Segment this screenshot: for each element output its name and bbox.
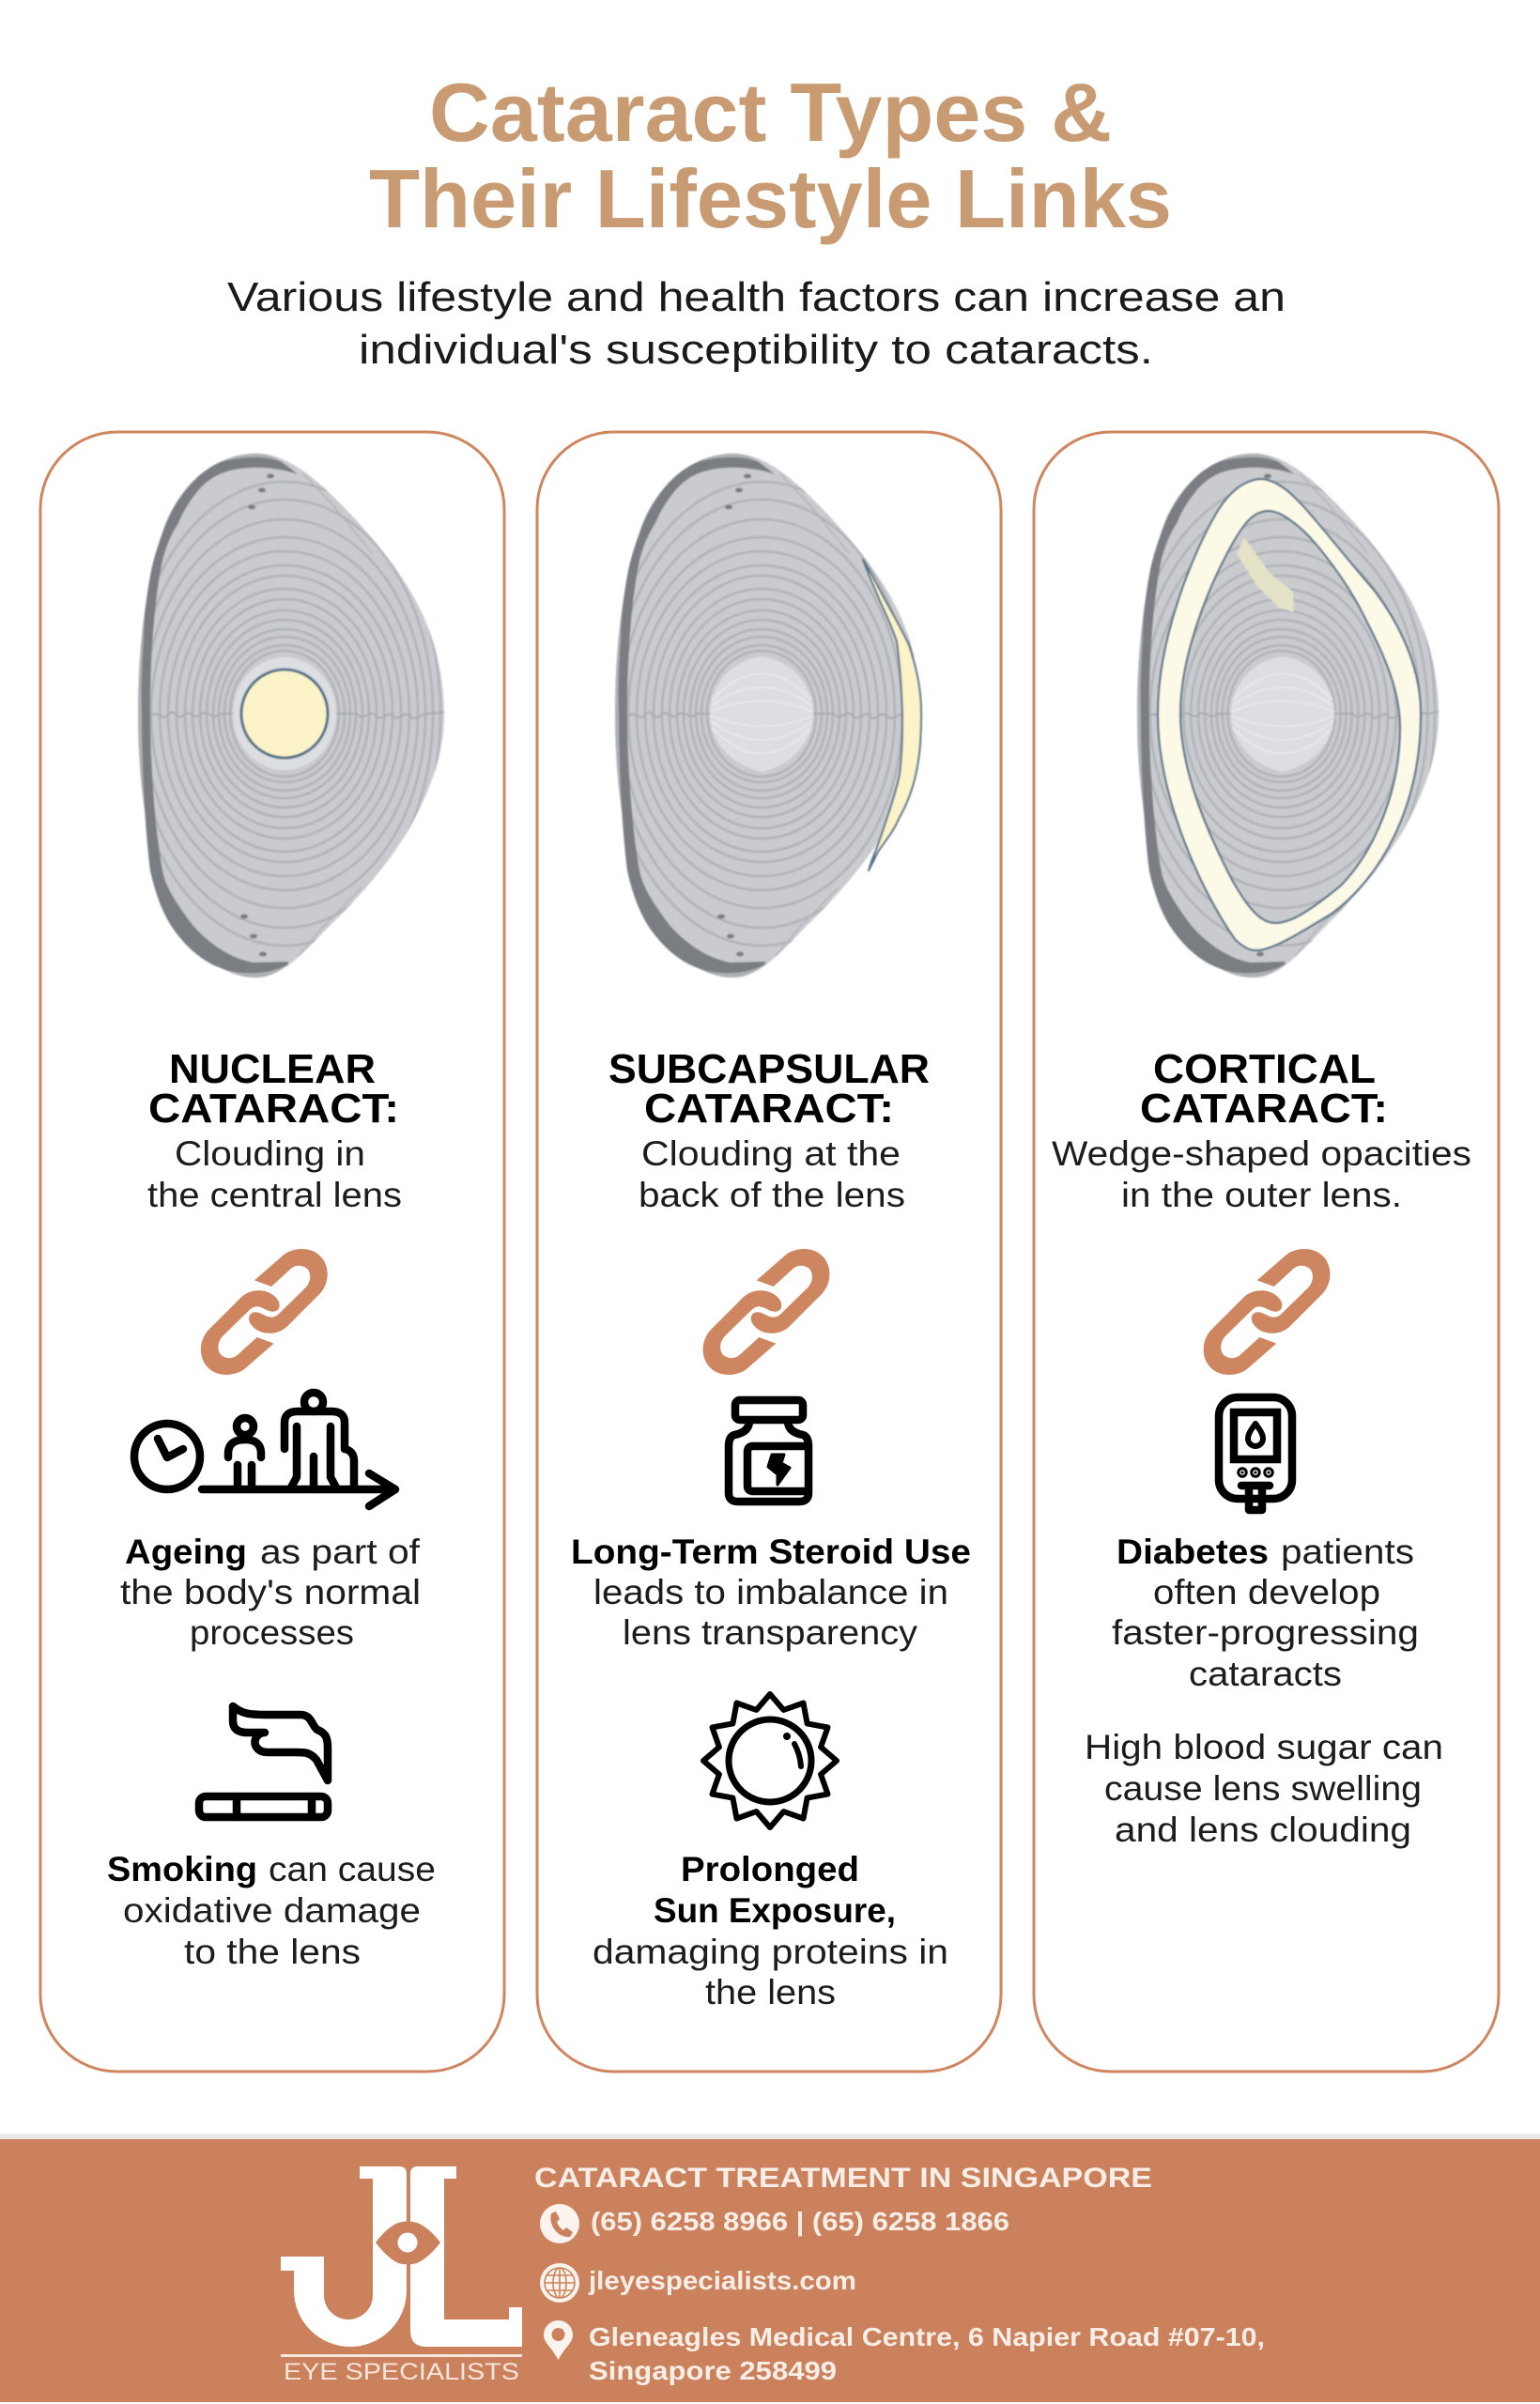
text: ageing: Ageing: [125, 1533, 247, 1571]
description: Clouding at the: [641, 1134, 901, 1173]
panel outline: [1034, 432, 1499, 2072]
heading: CATARACT:: [1140, 1086, 1388, 1132]
icon: glucose meter: [1219, 1397, 1292, 1510]
text: ageing: the body's normal: [120, 1573, 421, 1611]
text: smoking: to the lens: [184, 1933, 361, 1971]
panel outline: [537, 432, 1001, 2072]
text: phone numbers: (65) 6258 8966 | (65) 6258 1866: [591, 2207, 1009, 2236]
text: smoking: Smoking: [107, 1850, 257, 1888]
icon: ageing timeline: [134, 1393, 395, 1506]
title: Cataract Types &: [429, 66, 1112, 159]
text: high blood sugar: cause lens swelling: [1104, 1769, 1422, 1808]
panel: cortical cataract: [1034, 432, 1499, 2072]
text: ageing: as part of: [260, 1533, 421, 1571]
heading: CORTICAL: [1153, 1046, 1376, 1092]
icon: sun: [703, 1694, 837, 1827]
text: address: [589, 2322, 1265, 2385]
heading: SUBCAPSULAR: [608, 1046, 930, 1092]
text: steroid use: Long-Term Steroid Use: [571, 1533, 971, 1571]
logo: [281, 2166, 522, 2385]
icon: cigarette: [199, 1706, 328, 1817]
description: in the outer lens.: [1121, 1176, 1402, 1214]
text: diabetes: faster-progressing: [1112, 1613, 1419, 1652]
text: steroid use: leads to imbalance in: [593, 1573, 948, 1611]
text: high blood sugar: [1085, 1728, 1443, 1849]
description: [639, 1134, 905, 1214]
text: sun exposure: the lens: [705, 1973, 836, 2011]
heading: CATARACT:: [148, 1086, 399, 1132]
heading: [148, 1046, 399, 1132]
text: sun exposure: damaging proteins in: [593, 1933, 948, 1971]
logo: EYE SPECIALISTS: [284, 2359, 519, 2385]
heading: [608, 1046, 930, 1132]
text: high blood sugar: and lens clouding: [1115, 1811, 1411, 1849]
text: smoking: oxidative damage: [123, 1891, 421, 1930]
text: high blood sugar: High blood sugar can: [1085, 1728, 1443, 1766]
icon: link: [201, 1249, 328, 1375]
text: steroid use: lens transparency: [623, 1613, 918, 1652]
title: Their Lifestyle Links: [369, 152, 1172, 245]
text: diabetes: [1112, 1533, 1419, 1693]
description: [147, 1134, 402, 1214]
heading: [1140, 1046, 1388, 1132]
subtitle: Various lifestyle and health factors can increase an: [227, 274, 1286, 320]
lens diagram: central clouding: [129, 454, 444, 978]
icon: link: [703, 1249, 829, 1375]
text: ageing: processes: [190, 1613, 354, 1652]
description: back of the lens: [639, 1176, 905, 1214]
description: Wedge-shaped opacities: [1052, 1134, 1471, 1173]
panel: nuclear cataract: [40, 432, 504, 2072]
text: smoking: can cause: [269, 1850, 436, 1888]
icon: phone: [540, 2204, 579, 2243]
icon: location pin: [544, 2320, 573, 2360]
footer heading: CATARACT TREATMENT IN SINGAPORE: [534, 2163, 1152, 2194]
panel outline: [40, 432, 504, 2072]
footer band: [0, 2134, 1540, 2402]
subtitle: individual's susceptibility to cataracts.: [359, 327, 1153, 373]
text: smoking: [107, 1850, 436, 1971]
lens diagram: clouding at back: [606, 454, 921, 978]
text: address: Singapore 258499: [589, 2356, 837, 2385]
description: the central lens: [147, 1176, 402, 1214]
text: website: jleyespecialists.com: [588, 2266, 856, 2295]
text: ageing: [120, 1533, 421, 1652]
lens diagram: outer lens opacities: [1128, 454, 1439, 978]
text: sun exposure: Prolonged: [681, 1850, 859, 1888]
text: steroid use: [571, 1533, 971, 1652]
text: diabetes: patients: [1281, 1533, 1414, 1571]
text: diabetes: often develop: [1153, 1573, 1380, 1611]
description: [1052, 1134, 1471, 1214]
title: [369, 66, 1172, 245]
icon: globe: [540, 2263, 579, 2303]
panel: subcapsular cataract: [537, 432, 1001, 2072]
description: Clouding in: [175, 1134, 365, 1173]
subtitle: [227, 274, 1286, 373]
icon: steroid jar: [729, 1400, 808, 1502]
icon: link: [1204, 1249, 1330, 1375]
text: sun exposure: [593, 1850, 948, 2011]
text: sun exposure: Sun Exposure,: [654, 1891, 896, 1930]
text: address: Gleneagles Medical Centre, 6 Napier Road #07-10,: [589, 2322, 1265, 2351]
text: diabetes: cataracts: [1189, 1655, 1342, 1693]
text: diabetes: Diabetes: [1116, 1533, 1269, 1571]
heading: NUCLEAR: [169, 1046, 376, 1092]
heading: CATARACT:: [644, 1086, 894, 1132]
